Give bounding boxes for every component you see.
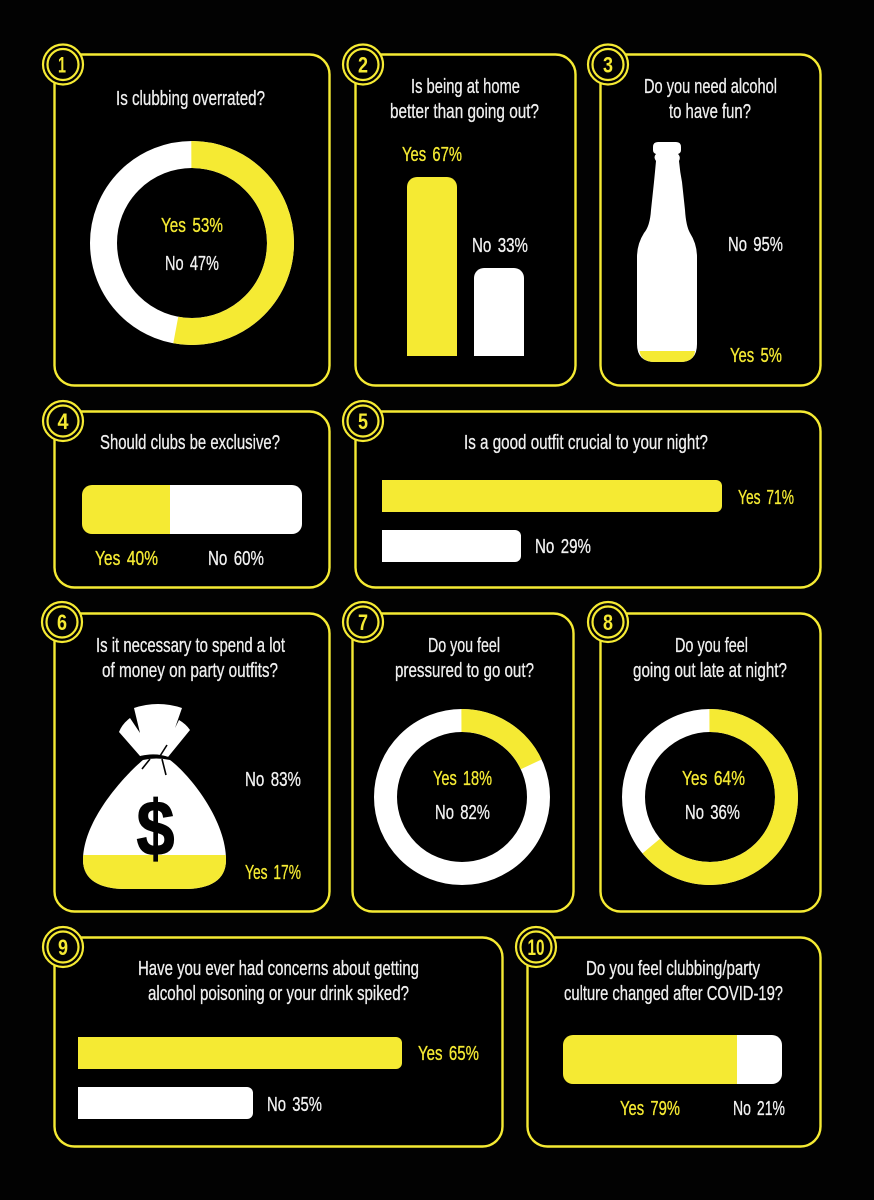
badge 8: 8 [603,610,613,635]
question 4: Should clubs be exclusive? [100,431,280,454]
badge 4 [43,401,83,441]
label yes 79: Yes 79% [620,1097,680,1120]
question 7: Do you feel [428,634,500,657]
bar no 29 [382,530,521,562]
label no 95: No 95% [728,233,783,256]
question 3: Do you need alcohol [644,75,777,98]
question 2: Is being at home [411,75,520,98]
question 8: going out late at night? [633,659,787,682]
icon: money bag [83,704,226,889]
question 10: Do you feel clubbing/party [586,957,761,980]
badge 5: 5 [358,409,368,434]
bar yes 71 [382,480,722,512]
panel 4: clubs exclusive [43,401,330,588]
badge 1 [43,44,83,84]
panel 2: home vs going out [343,44,576,386]
icon: bottle [637,142,697,362]
badge 2: 2 [358,52,368,78]
donut chart 7 [386,720,538,874]
badge 6 [42,602,82,642]
question 8: Do you feel [675,634,748,657]
panel 6: spending on outfits [42,602,330,912]
question 6 [96,634,285,682]
panel 1: is clubbing overrated [43,44,330,386]
badge 2 [343,44,383,84]
panel 3: alcohol to have fun [588,44,820,386]
question 10 [564,957,783,1005]
badge 3: 3 [603,52,613,78]
question 9: Have you ever had concerns about getting [138,957,419,980]
panel 7: pressured to go out [343,602,574,912]
label no 47: No 47% [165,252,219,275]
label no 83: No 83% [245,768,301,791]
badge 7 [343,602,383,642]
label no 36: No 36% [685,801,740,824]
badge 9 [43,927,83,967]
label yes 67: Yes 67% [402,143,462,166]
panel 8: safe late at night [588,602,820,912]
label no 35: No 35% [267,1093,322,1116]
question 6: Is it necessary to spend a lot [96,634,285,657]
question 3: to have fun? [669,100,751,123]
label yes 71: Yes 71% [738,486,794,509]
badge 5 [343,401,383,441]
label yes 5: Yes 5% [730,344,782,367]
label no 33: No 33% [472,234,528,257]
question 9: alcohol poisoning or your drink spiked? [148,982,409,1005]
donut chart 8 [634,720,786,874]
donut chart 1 [104,154,280,332]
question 5: Is a good outfit crucial to your night? [464,431,708,454]
panel 5: good outfit [343,401,820,588]
question 8 [633,634,787,682]
question 7: pressured to go out? [395,659,534,682]
label yes 53: Yes 53% [161,214,223,237]
panel 9: alcohol poisoning concerns [43,927,502,1146]
question 9 [138,957,419,1005]
label yes 18: Yes 18% [433,767,492,790]
label no 29: No 29% [535,535,591,558]
stacked bar 79/21 [563,1035,782,1084]
badge 7: 7 [358,610,368,635]
bar yes 67 [407,177,457,356]
bar no 33 [474,268,524,356]
question 2: better than going out? [390,100,539,123]
badge 1: 1 [58,52,66,78]
label no 82: No 82% [435,801,490,824]
label yes 64: Yes 64% [682,767,745,790]
label yes 17: Yes 17% [245,861,301,884]
badge 3 [588,44,628,84]
question 6: of money on party outfits? [102,659,278,682]
question 10: culture changed after COVID-19? [564,982,783,1005]
question 7 [395,634,534,682]
badge 8 [588,602,628,642]
label yes 65: Yes 65% [418,1042,479,1065]
bar yes 65 [78,1037,402,1069]
badge 9: 9 [58,935,68,960]
question 1: Is clubbing overrated? [116,87,265,110]
label yes 40: Yes 40% [95,547,158,570]
label no 21: No 21% [733,1097,785,1120]
stacked bar 40/60 [82,485,302,534]
question 2 [390,75,539,123]
label no 60: No 60% [208,547,264,570]
question 3 [644,75,777,123]
badge 10: 10 [528,935,544,960]
icon: money bag: $ [136,784,174,872]
bar no 35 [78,1087,253,1119]
badge 6: 6 [57,610,67,635]
badge 10 [516,927,556,967]
badge 4: 4 [58,409,69,434]
panel 10: culture after covid [516,927,820,1146]
